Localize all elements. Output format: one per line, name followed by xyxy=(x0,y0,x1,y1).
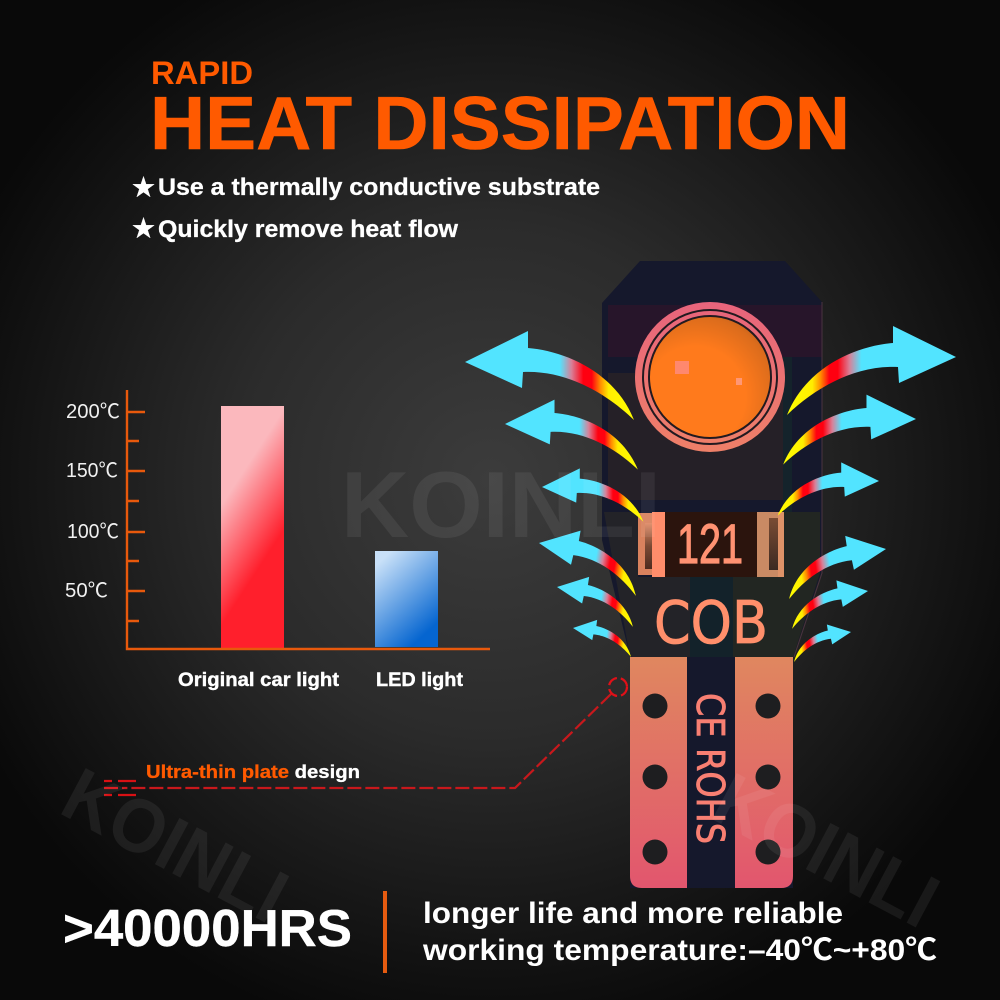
title: RAPID xyxy=(151,55,253,91)
axis labels: 50℃ xyxy=(65,580,108,602)
axis labels: 200℃ xyxy=(66,401,120,423)
axis labels: 150℃ xyxy=(66,460,118,482)
category labels: LED light xyxy=(376,670,464,691)
watermarks: KOINLI xyxy=(341,452,661,557)
ultra-thin plate callout xyxy=(104,678,627,795)
axis labels xyxy=(65,401,120,602)
feature bullets: ★ xyxy=(132,215,155,241)
lifetime description xyxy=(422,897,937,967)
callout text: Ultra-thin plate design xyxy=(146,762,360,782)
right contact leg xyxy=(735,657,793,888)
feature bullets: Use a thermally conductive substrate xyxy=(158,174,600,201)
bar: original car light xyxy=(221,406,284,648)
LED lens xyxy=(635,302,785,452)
lifetime description: working temperature:–40℃~+80℃ xyxy=(422,934,937,967)
LED board xyxy=(602,261,822,888)
watermarks xyxy=(49,452,952,945)
feature bullets: ★ xyxy=(132,174,155,200)
category labels: Original car light xyxy=(178,670,340,691)
heat arrows left xyxy=(465,331,645,657)
COB label: COB xyxy=(654,588,768,657)
feature bullets xyxy=(132,174,600,243)
lifetime figure: >40000HRS xyxy=(63,900,352,958)
divider bar xyxy=(383,891,387,973)
lifetime description: longer life and more reliable xyxy=(423,897,843,930)
bar: LED light xyxy=(375,551,438,647)
feature bullets: Quickly remove heat flow xyxy=(158,216,458,243)
left contact leg xyxy=(630,657,687,888)
title: HEAT DISSIPATION xyxy=(150,81,850,165)
resistor 121 xyxy=(638,512,784,577)
dashed leader line xyxy=(104,678,627,795)
watermarks: KOINLI xyxy=(49,752,301,940)
watermarks: KOINLI xyxy=(700,757,952,945)
heat arrows right xyxy=(778,326,956,662)
contact holes xyxy=(642,694,780,864)
CE ROHS label: CE ROHS xyxy=(688,693,732,844)
category labels xyxy=(178,670,464,691)
bar chart xyxy=(65,390,490,691)
axis labels: 100℃ xyxy=(67,521,119,543)
resistor 121: 121 xyxy=(677,512,743,575)
board body xyxy=(602,261,822,888)
chart axes and ticks xyxy=(127,390,490,649)
